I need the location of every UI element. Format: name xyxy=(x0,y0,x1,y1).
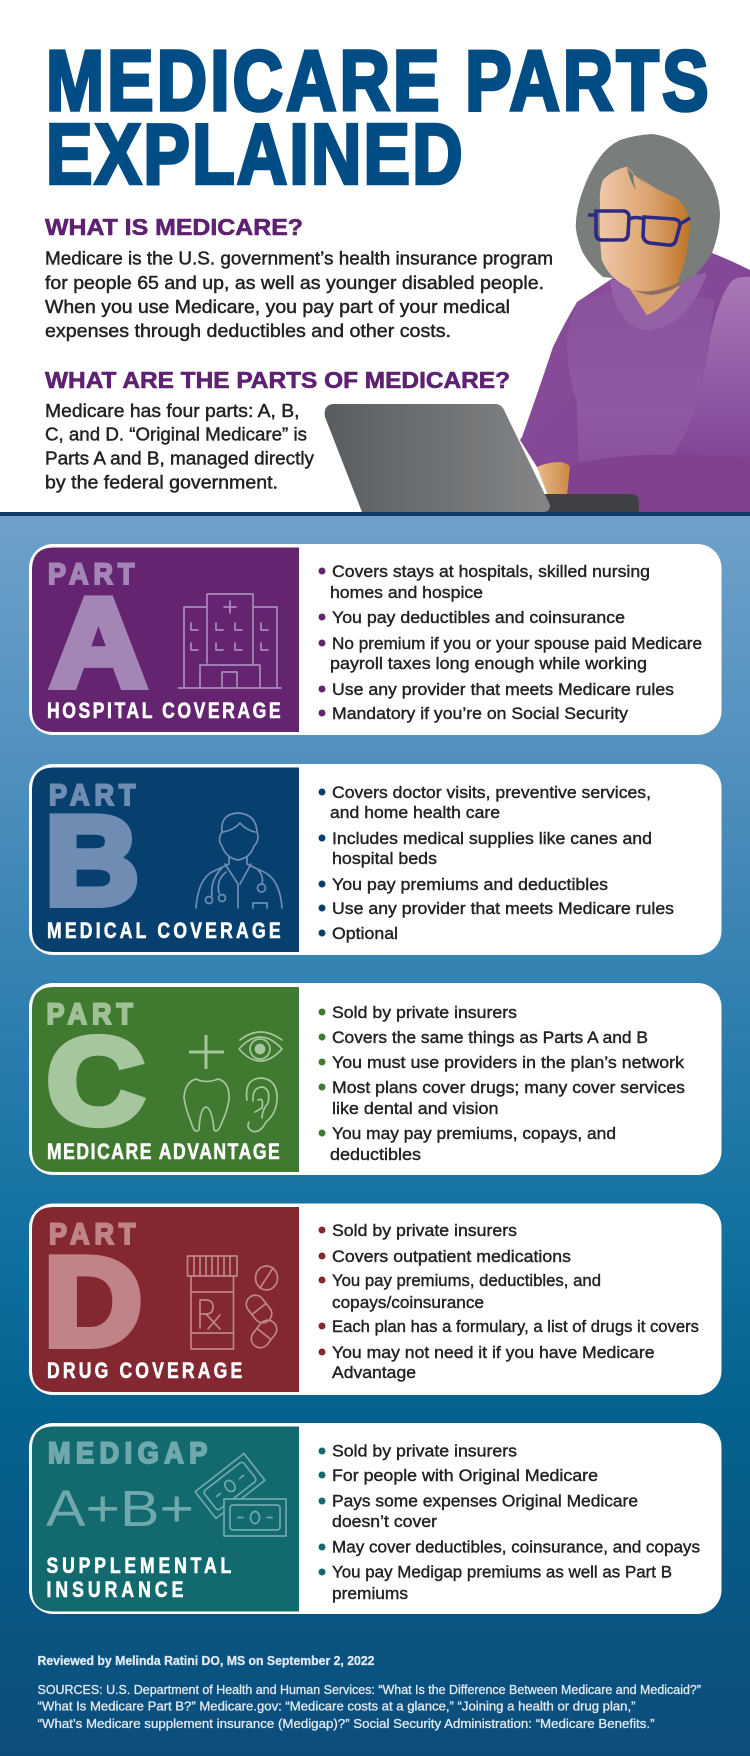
icon: hospital xyxy=(178,594,281,688)
panel: part D xyxy=(29,1204,722,1395)
part B bullets: hospital beds xyxy=(332,849,437,868)
hair strand xyxy=(627,168,668,196)
part A bullets: No premium if you or your spouse paid Medicare xyxy=(332,634,702,653)
part C bullets: like dental and vision xyxy=(332,1099,498,1118)
part B bullets: and home health care xyxy=(330,803,500,822)
panel: part C xyxy=(29,983,722,1175)
panel: medigap xyxy=(29,1423,722,1614)
text block: what is medicare: for people 65 and up, as well as younger disabled people. xyxy=(45,272,544,293)
part B bullets: Optional xyxy=(332,924,398,943)
title xyxy=(46,35,709,202)
medigap caption: INSURANCE xyxy=(46,1578,183,1603)
part B label: PART xyxy=(49,779,136,812)
part C bullets: Covers the same things as Parts A and B xyxy=(332,1028,648,1047)
text block: parts of medicare: C, and D. “Original Medicare” is xyxy=(45,424,307,444)
text block: parts of medicare: Parts A and B, managed directly xyxy=(45,448,315,468)
medigap bullets: You pay Medigap premiums as well as Part B xyxy=(332,1562,672,1582)
text block: what is medicare: When you use Medicare, you pay part of your medical xyxy=(45,296,510,317)
part B bullets: Use any provider that meets Medicare rules xyxy=(332,899,674,918)
medigap bullets: premiums xyxy=(332,1584,408,1603)
medigap bullets: Sold by private insurers xyxy=(332,1442,517,1460)
sleeve xyxy=(668,277,750,470)
laptop xyxy=(325,404,550,512)
part C bullets: You may pay premiums, copays, and xyxy=(332,1124,616,1143)
part C bullets: Most plans cover drugs; many cover services xyxy=(332,1078,685,1097)
divider xyxy=(0,512,750,516)
part D bullets: You pay premiums, deductibles, and xyxy=(332,1271,601,1290)
hand xyxy=(537,462,570,496)
A+B+ formula: A+B+ xyxy=(46,1480,194,1537)
text block: what is medicare: expenses through deductibles and other costs. xyxy=(45,320,451,341)
face xyxy=(600,167,690,293)
part D bullets: You may not need it if you have Medicare xyxy=(332,1343,654,1362)
letter C: C xyxy=(47,1013,144,1149)
icon: prescription bottle and pills xyxy=(188,1256,280,1351)
title: MEDICARE PARTS xyxy=(46,35,709,129)
icon: money bills xyxy=(195,1454,286,1536)
panel: part B xyxy=(29,764,722,955)
part D bullets: copays/coinsurance xyxy=(332,1293,484,1312)
glasses xyxy=(588,211,690,245)
sources: “What’s Medicare supplement insurance (Medigap)?” Social Security Administration: “Medicare Benefits.” xyxy=(38,1717,654,1731)
part D bullets: Each plan has a formulary, a list of drugs it covers xyxy=(332,1317,699,1336)
part A bullets: Mandatory if you’re on Social Security xyxy=(332,704,629,723)
icon: doctor xyxy=(196,813,282,908)
sweater xyxy=(520,253,750,512)
medigap caption: SUPPLEMENTAL xyxy=(46,1554,231,1579)
text block: what is medicare: Medicare is the U.S. government’s health insurance program xyxy=(45,248,553,268)
icon: tooth xyxy=(184,1079,229,1131)
part B caption: MEDICAL COVERAGE xyxy=(47,919,281,944)
part A label: PART xyxy=(48,558,135,591)
icon: ear xyxy=(247,1078,277,1132)
icon: plus xyxy=(189,1035,224,1069)
review credit: Reviewed by Melinda Ratini DO, MS on September 2, 2022 xyxy=(38,1654,375,1668)
lower body xyxy=(566,454,750,512)
part D bullets: Advantage xyxy=(332,1363,416,1382)
medigap caption xyxy=(46,1554,231,1603)
torso xyxy=(567,285,715,470)
part C bullets: deductibles xyxy=(330,1145,421,1164)
part C caption: MEDICARE ADVANTAGE xyxy=(47,1140,280,1165)
part A bullets: You pay deductibles and coinsurance xyxy=(332,608,625,627)
illustration: woman at laptop xyxy=(325,134,750,512)
letter B: B xyxy=(45,790,139,931)
page background xyxy=(0,516,750,1756)
medigap bullets: For people with Original Medicare xyxy=(332,1466,598,1485)
letter D: D xyxy=(44,1231,142,1372)
medigap label: MEDIGAP xyxy=(48,1437,207,1470)
part B bullets xyxy=(318,783,674,943)
part B bullets: Covers doctor visits, preventive services, xyxy=(332,783,651,802)
medigap bullets: doesn’t cover xyxy=(332,1512,437,1531)
medigap bullets: May cover deductibles, coinsurance, and copays xyxy=(332,1538,700,1556)
sources: “What Is Medicare Part B?” Medicare.gov: “Medicare costs at a glance,” “Joining a health or drug plan,” xyxy=(38,1700,636,1714)
medigap bullets: Pays some expenses Original Medicare xyxy=(332,1492,638,1510)
part D bullets: Sold by private insurers xyxy=(332,1221,517,1240)
part A bullets: homes and hospice xyxy=(330,583,483,602)
laptop base xyxy=(540,494,639,512)
title: EXPLAINED xyxy=(46,108,463,202)
part A bullets: payroll taxes long enough while working xyxy=(330,654,647,673)
neck shadow xyxy=(634,277,690,295)
medigap bullets xyxy=(318,1442,700,1603)
part D caption: DRUG COVERAGE xyxy=(47,1359,242,1384)
text block: what is medicare xyxy=(45,248,553,341)
part B bullets: Includes medical supplies like canes and xyxy=(332,829,652,848)
text block: parts of medicare: Medicare has four parts: A, B, xyxy=(45,400,300,421)
part C bullets: Sold by private insurers xyxy=(332,1003,517,1022)
part D label: PART xyxy=(49,1218,136,1251)
part D bullets xyxy=(318,1221,699,1382)
sources: SOURCES: U.S. Department of Health and Human Services: “What Is the Difference Between Medicare and Medicaid?” xyxy=(38,1683,701,1697)
icon: eye xyxy=(239,1032,282,1061)
heading: what is medicare: WHAT IS MEDICARE? xyxy=(45,214,303,240)
part A caption: HOSPITAL COVERAGE xyxy=(47,699,281,724)
neck xyxy=(628,286,680,315)
part B bullets: You pay premiums and deductibles xyxy=(332,875,608,894)
part C bullets xyxy=(318,1003,685,1164)
text block: parts of medicare xyxy=(45,400,315,492)
sources xyxy=(38,1683,701,1731)
part A bullets: Use any provider that meets Medicare rules xyxy=(332,680,674,699)
heading: what are the parts: WHAT ARE THE PARTS OF MEDICARE? xyxy=(45,367,510,393)
part A bullets xyxy=(318,562,702,723)
hair xyxy=(576,134,720,292)
part D bullets: Covers outpatient medications xyxy=(332,1247,571,1266)
letter A: A xyxy=(50,572,146,713)
part C bullets: You must use providers in the plan’s network xyxy=(332,1053,685,1072)
sweater collar xyxy=(610,273,707,330)
part A bullets: Covers stays at hospitals, skilled nursing xyxy=(332,562,650,581)
panel: part A xyxy=(29,544,722,735)
part C label: PART xyxy=(46,998,133,1031)
text block: parts of medicare: by the federal government. xyxy=(45,472,278,492)
